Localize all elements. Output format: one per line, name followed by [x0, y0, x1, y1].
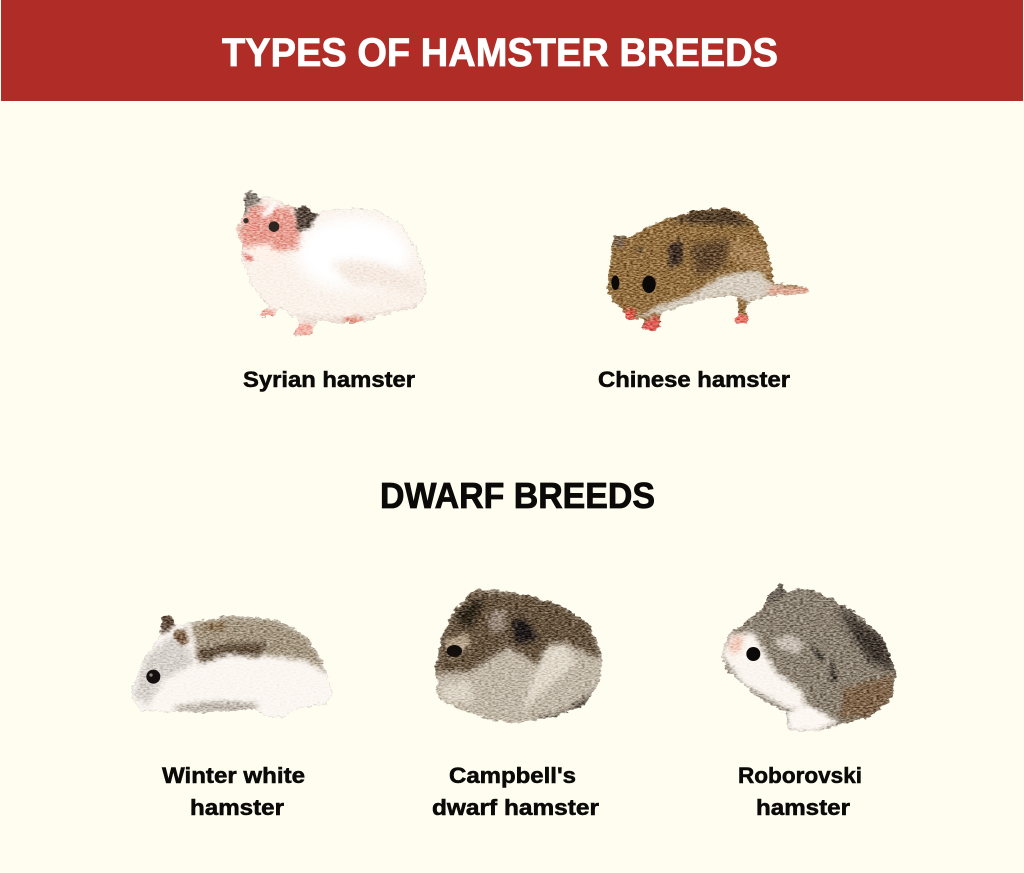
label: Campbell's dwarf hamster — [432, 763, 599, 820]
label: Winter white hamster: Winter white — [162, 763, 305, 788]
icon: Syrian hamster — [235, 190, 427, 337]
label: Roborovski hamster — [738, 763, 862, 820]
icon: Roborovski hamster — [720, 583, 897, 732]
label: Campbell's dwarf hamster: dwarf hamster — [432, 795, 599, 820]
label: Roborovski hamster: hamster — [756, 795, 850, 820]
icon: Campbell's dwarf hamster — [434, 588, 603, 724]
label: Syrian hamster: Syrian hamster — [243, 367, 415, 392]
icon: Chinese hamster — [606, 207, 810, 333]
icon: Winter white hamster — [131, 614, 332, 718]
label: Winter white hamster: hamster — [190, 795, 284, 820]
label: Winter white hamster — [162, 763, 305, 820]
title: TYPES OF HAMSTER BREEDS — [222, 31, 778, 75]
heading: dwarf breeds: DWARF BREEDS — [380, 475, 655, 516]
title banner — [1, 0, 1023, 101]
label: Roborovski hamster: Roborovski — [738, 763, 862, 788]
label: Campbell's dwarf hamster: Campbell's — [449, 763, 576, 788]
label: Chinese hamster: Chinese hamster — [598, 367, 790, 392]
